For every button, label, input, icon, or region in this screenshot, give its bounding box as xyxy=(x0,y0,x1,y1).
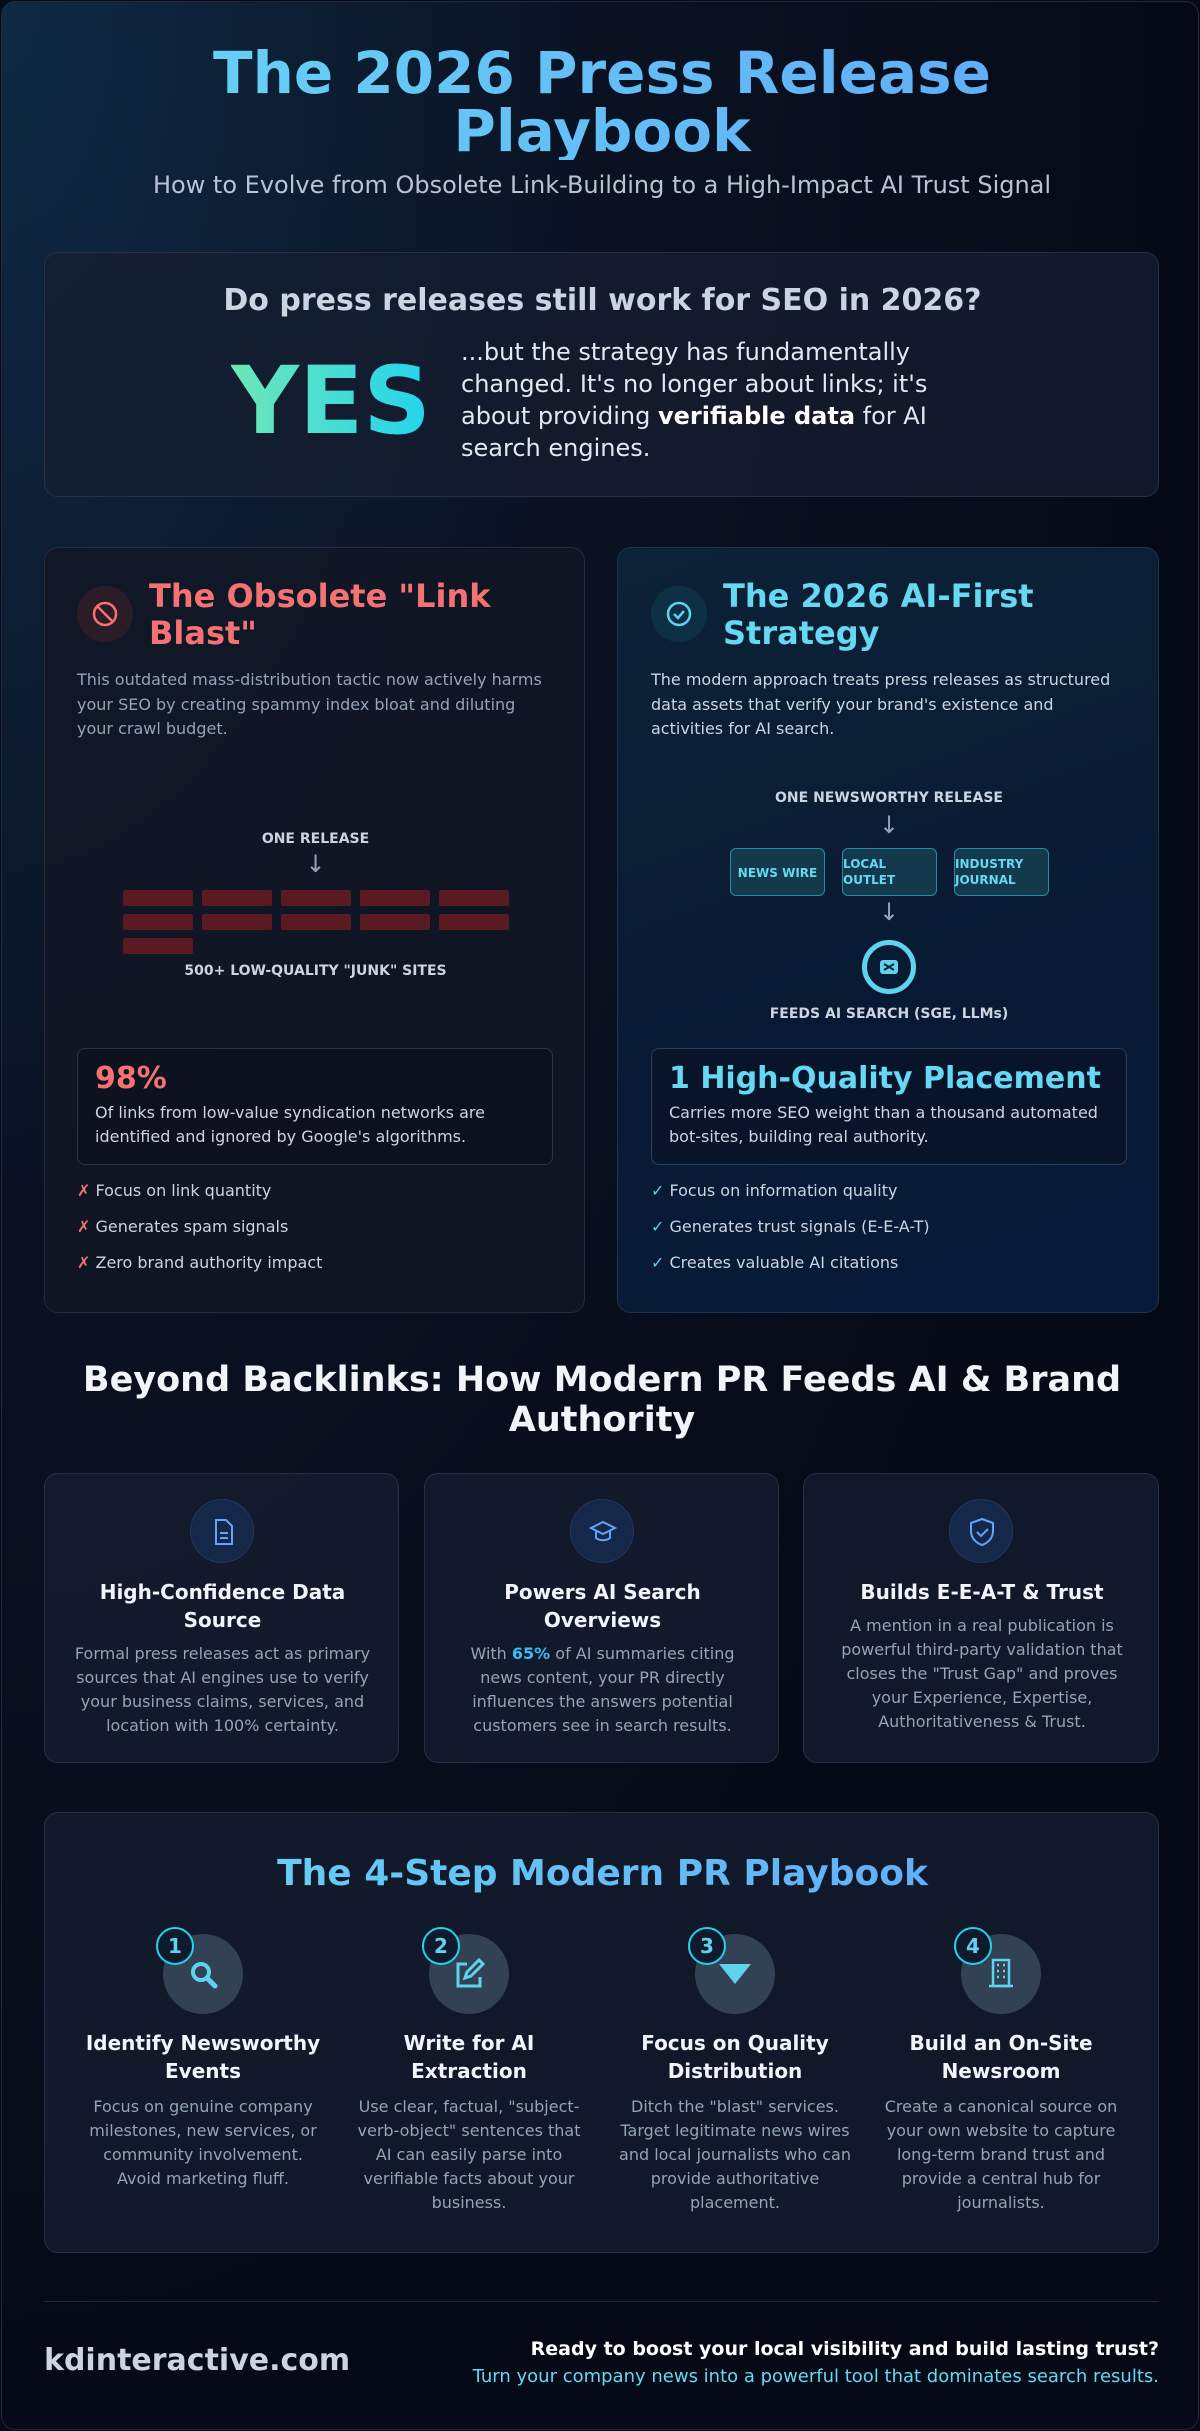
list: positives: ✓ Creates valuable AI citations xyxy=(651,1253,898,1272)
stat box 98% xyxy=(77,1048,553,1165)
explanation text: ...but the strategy has fundamentally changed. It's no longer about links; it's about providing verifiable data for AI search engines. xyxy=(461,338,927,462)
title: The 2026 Press Release xyxy=(213,39,991,107)
body: With 65% of AI summaries citing news content, your PR directly influences the answers potential customers see in search results. xyxy=(470,1644,735,1735)
panel: 4-step playbook xyxy=(44,1812,1159,2253)
subtitle: How to Evolve from Obsolete Link-Building to a High-Impact AI Trust Signal xyxy=(153,171,1051,199)
diagram: flow: LOCAL xyxy=(843,857,886,871)
card: builds e-e-a-t xyxy=(803,1473,1159,1763)
card: powers ai search overviews xyxy=(424,1473,779,1763)
diagram: flow: NEWS WIRE xyxy=(738,866,817,880)
body: Formal press releases act as primary sources that AI engines use to verify your business claims, services, and location with 100% certainty. xyxy=(75,1644,370,1735)
step 2: Write for AI Extraction xyxy=(404,2031,534,2083)
icon: graduation cap xyxy=(570,1499,634,1563)
diagram: blast xyxy=(123,831,509,979)
title: Playbook xyxy=(453,97,751,165)
description: The modern approach treats press releases as structured data assets that verify your brand's existence and activities for AI search. xyxy=(651,670,1110,738)
list: positives: ✓ Focus on information quality xyxy=(651,1181,897,1200)
diagram: flow: INDUSTRY xyxy=(955,857,1023,871)
icon: ban xyxy=(77,586,133,642)
step 4 xyxy=(885,1927,1117,2212)
diagram: flow: ↓ xyxy=(879,898,899,926)
panel: yes verdict xyxy=(44,252,1159,497)
diagram: flow: OUTLET xyxy=(843,873,895,887)
step 3: 3 xyxy=(700,1934,714,1958)
step 1: 1 xyxy=(168,1934,182,1958)
step 1 xyxy=(86,1927,320,2188)
diagram: blast: ONE RELEASE xyxy=(262,831,369,847)
diagram: flow: JOURNAL xyxy=(955,873,1016,887)
stat box 98%: Of links from low-value syndication networks are identified and ignored by Google's algorithms. xyxy=(95,1103,485,1146)
list: positives: ✓ Generates trust signals (E-E-A-T) xyxy=(651,1217,930,1236)
diagram: flow: FEEDS AI SEARCH (SGE, LLMs) xyxy=(770,1006,1008,1022)
heading xyxy=(45,1853,1160,1894)
step 1: Identify Newsworthy Events xyxy=(86,2031,320,2083)
description: This outdated mass-distribution tactic now actively harms your SEO by creating spammy index bloat and diluting your crawl budget. xyxy=(77,670,542,738)
diagram: flow: ONE NEWSWORTHY RELEASE xyxy=(775,790,1003,806)
stat box placement xyxy=(651,1048,1127,1165)
footer: brand: kdinteractive.com xyxy=(44,2343,350,2378)
list: negatives xyxy=(77,1181,322,1272)
icon: shield xyxy=(949,1499,1013,1563)
title: High-Confidence Data Source xyxy=(100,1580,345,1632)
step 3: Ditch the "blast" services. Target legitimate news wires and local journalists who can provide authoritative placement. xyxy=(619,2097,851,2212)
yes: YES xyxy=(231,347,431,456)
heading: The 2026 AI-First Strategy xyxy=(723,577,1034,652)
icon: document xyxy=(190,1499,254,1563)
list: positives xyxy=(651,1181,930,1272)
body: A mention in a real publication is powerful third-party validation that closes the "Trust Gap" and proves your Experience, Expertise, Authoritativeness & Trust. xyxy=(841,1616,1123,1731)
stat box placement: Carries more SEO weight than a thousand automated bot-sites, building real authority. xyxy=(669,1103,1098,1146)
list: negatives: ✗ Zero brand authority impact xyxy=(77,1253,322,1272)
step 2: Use clear, factual, "subject-verb-object" sentences that AI can easily parse into verifiable facts about your business. xyxy=(358,2097,580,2212)
diagram: blast: 500+ LOW-QUALITY "JUNK" SITES xyxy=(184,963,447,979)
step 4: 4 xyxy=(966,1934,980,1958)
panel: obsolete link blast xyxy=(44,547,585,1313)
step 4: Build an On-Site Newsroom xyxy=(909,2031,1093,2083)
section heading: beyond backlinks: Beyond Backlinks: How Modern PR Feeds AI & Brand Authority xyxy=(83,1360,1121,1440)
stat box 98%: 98% xyxy=(95,1061,167,1096)
diagram: flow xyxy=(730,790,1049,1022)
heading: The Obsolete "Link Blast" xyxy=(149,577,490,652)
title xyxy=(2,44,1200,160)
step 3 xyxy=(619,1927,851,2212)
footer: call to action: Turn your company news into a powerful tool that dominates search results. xyxy=(473,2366,1159,2387)
diagram: flow: ↓ xyxy=(879,811,899,839)
step 1: Focus on genuine company milestones, new services, or community involvement. Avoid marketing fluff. xyxy=(89,2097,317,2188)
title: Builds E-E-A-T & Trust xyxy=(860,1580,1104,1604)
panel: ai-first strategy xyxy=(617,547,1159,1313)
list: negatives: ✗ Generates spam signals xyxy=(77,1217,288,1236)
question heading: Do press releases still work for SEO in 2026? xyxy=(223,283,982,318)
footer: call to action: Ready to boost your local visibility and build lasting trust? xyxy=(531,2338,1159,2360)
stat box placement: 1 High-Quality Placement xyxy=(669,1061,1101,1096)
step 2: 2 xyxy=(434,1934,448,1958)
step 3: Focus on Quality Distribution xyxy=(641,2031,829,2083)
list: negatives: ✗ Focus on link quantity xyxy=(77,1181,271,1200)
card: high-confidence data source xyxy=(44,1473,399,1763)
diagram: blast: ↓ xyxy=(305,850,326,878)
icon: check xyxy=(651,586,707,642)
step 2 xyxy=(358,1927,580,2212)
footer: call to action xyxy=(472,2338,1159,2387)
step 4: Create a canonical source on your own website to capture long-term brand trust and provide a central hub for journalists. xyxy=(885,2097,1117,2212)
title: Powers AI Search Overviews xyxy=(504,1580,701,1632)
heading: The 4-Step Modern PR Playbook xyxy=(277,1853,928,1894)
